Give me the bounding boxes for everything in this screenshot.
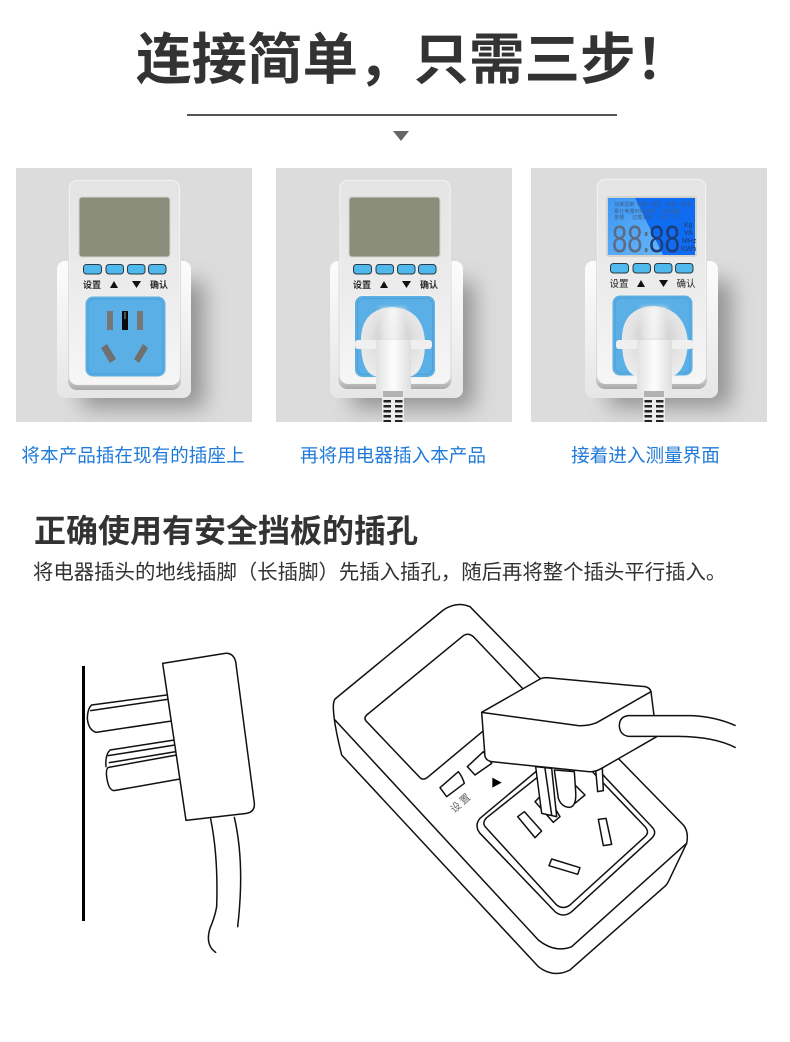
lcd screen: 过载清零 [632, 213, 654, 221]
lcd screen: 金额 [614, 213, 625, 221]
lcd screen: Kg [684, 222, 693, 229]
panel: step 3 measuring screen: 确认 [676, 278, 696, 290]
meter screen [365, 634, 538, 779]
lcd screen: 累计电量时间清零 [614, 207, 656, 215]
caption: step 3: 接着进入测量界面 [571, 445, 720, 466]
panel: step 2 plug inserted [276, 168, 512, 424]
lcd screen: KWh [681, 246, 696, 253]
lcd screen: 二氧化碳 [659, 207, 681, 215]
title: 连接简单，只需三步！ [136, 29, 691, 91]
panel: step 2 plug inserted: 确认 [420, 279, 438, 290]
lcd screen: VA [684, 230, 693, 237]
lcd screen: 88: [612, 219, 650, 261]
panel: step 1 device on wall socket: 确认 [150, 279, 168, 290]
diagram: plug side view against wall [82, 653, 254, 952]
panel: step 1 device on wall socket [16, 168, 252, 422]
icon: down triangle [393, 131, 409, 141]
caption: step 1: 将本产品插在现有的插座上 [21, 445, 245, 466]
title underline [187, 114, 617, 116]
panel: step 2 plug inserted: 设置 [353, 279, 371, 290]
socket holes [518, 783, 612, 874]
lcd screen: 88 [649, 219, 680, 261]
lcd screen [608, 198, 697, 261]
meter buttons [440, 752, 492, 797]
section heading: 正确使用有安全挡板的插孔 [34, 513, 418, 549]
lcd screen: 电量 [637, 200, 647, 208]
plug cord [619, 716, 736, 748]
lcd screen: 小时 [658, 213, 668, 221]
meter top face edge [335, 720, 687, 949]
lcd screen: 功率因数 [614, 200, 636, 208]
lcd screen: MHz [682, 238, 697, 245]
meter body outline [333, 604, 687, 973]
panel: step 1 device on wall socket: 设置 [83, 279, 101, 290]
lcd screen: 电流 [666, 200, 676, 208]
panel: step 3 measuring screen: 设置 [609, 279, 629, 290]
panel: step 3 measuring screen [531, 168, 767, 423]
lcd screen: 频率 [681, 200, 691, 208]
plug prongs [536, 767, 603, 817]
plug body [482, 678, 657, 772]
caption: step 2: 再将用电器插入本产品 [300, 445, 486, 466]
socket recess [477, 742, 655, 915]
lcd screen: 元 [673, 214, 678, 221]
button arrow [492, 778, 502, 788]
button label: 设置 [448, 790, 475, 816]
diagram: plug being inserted into meter [333, 604, 736, 973]
instruction text: 将电器插头的地线插脚（长插脚）先插入插孔，随后再将整个插头平行插入。 [33, 561, 726, 584]
lcd screen: 电压 [651, 200, 661, 208]
